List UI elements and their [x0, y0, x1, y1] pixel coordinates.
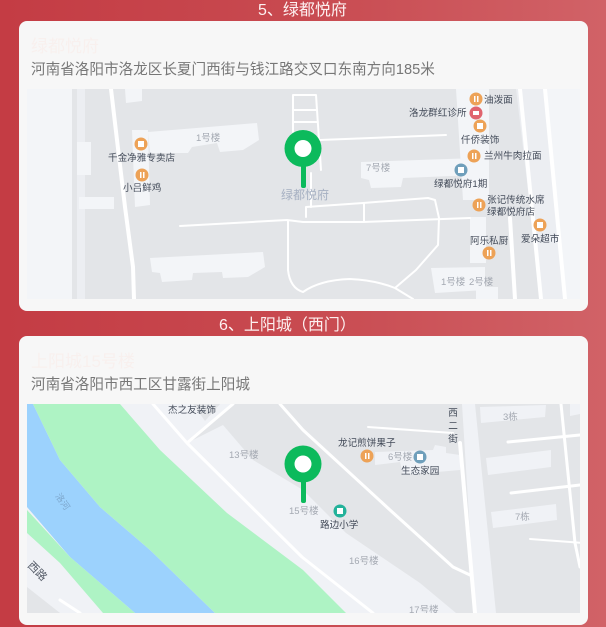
map: 上阳城 — [27, 404, 580, 613]
map labels: 绿都悦府店 — [487, 206, 535, 218]
map labels: 6号楼 — [388, 451, 413, 463]
map labels: 13号楼 — [229, 449, 259, 461]
map labels: 张记传统水席 — [487, 194, 545, 206]
river — [27, 404, 215, 613]
faint card title: 上阳城15号楼 — [31, 352, 135, 371]
map labels — [108, 94, 560, 288]
map labels: 龙记煎饼果子 — [338, 437, 396, 449]
map labels: 千金净雅专卖店 — [108, 152, 176, 164]
map labels: 街 — [448, 433, 458, 445]
map labels: 1号楼 — [441, 276, 466, 288]
map labels: 阿乐私厨 — [470, 235, 509, 247]
map labels: 西 — [448, 408, 458, 419]
map labels: 洛龙群红诊所 — [409, 107, 467, 119]
heading: 6 上阳城（西门）: 6、上阳城（西门） — [219, 317, 356, 334]
address text: 河南省洛阳市西工区甘露街上阳城 — [31, 377, 250, 393]
map labels: 1号楼 — [196, 132, 221, 144]
map labels: 爱朵超市 — [521, 233, 560, 245]
map labels: 杰之友装饰 — [168, 404, 216, 416]
map labels: 2号楼 — [469, 276, 494, 288]
map labels: 绿都悦府1期 — [434, 178, 487, 190]
icons: map points of interest — [134, 92, 546, 260]
icon: green location pin — [284, 446, 322, 503]
icon: green location pin — [284, 130, 322, 188]
address text: 河南省洛阳市洛龙区长夏门西街与钱江路交叉口东南方向185米 — [31, 62, 435, 78]
map labels — [25, 404, 530, 616]
heading: 5 绿都悦府: 5、绿都悦府 — [258, 2, 347, 19]
map labels: 油泼面 — [484, 94, 513, 106]
map: 绿都悦府 — [72, 89, 563, 299]
map labels: 生态家园 — [401, 465, 439, 477]
map labels: 3栋 — [503, 411, 518, 423]
map labels: 路边小学 — [320, 519, 359, 531]
map labels: 7号楼 — [366, 162, 391, 174]
panel: 绿都悦府 location card — [19, 21, 588, 311]
faint card title: 绿都悦府 — [31, 37, 99, 56]
green park strips — [27, 404, 346, 613]
panel: 上阳城 location card — [19, 336, 588, 625]
map labels: 15号楼 — [289, 505, 319, 517]
map labels: 小吕鲜鸡 — [123, 182, 161, 194]
icons: map points of interest — [334, 450, 426, 518]
map labels: 16号楼 — [349, 555, 379, 567]
map labels: 二 — [448, 421, 458, 432]
map labels: 仟侨装饰 — [461, 134, 500, 146]
map labels: 洛河 — [53, 491, 73, 512]
map labels: 兰州牛肉拉面 — [484, 150, 542, 162]
map labels: 7栋 — [515, 511, 530, 523]
map labels: 绿都悦府 — [281, 187, 329, 202]
